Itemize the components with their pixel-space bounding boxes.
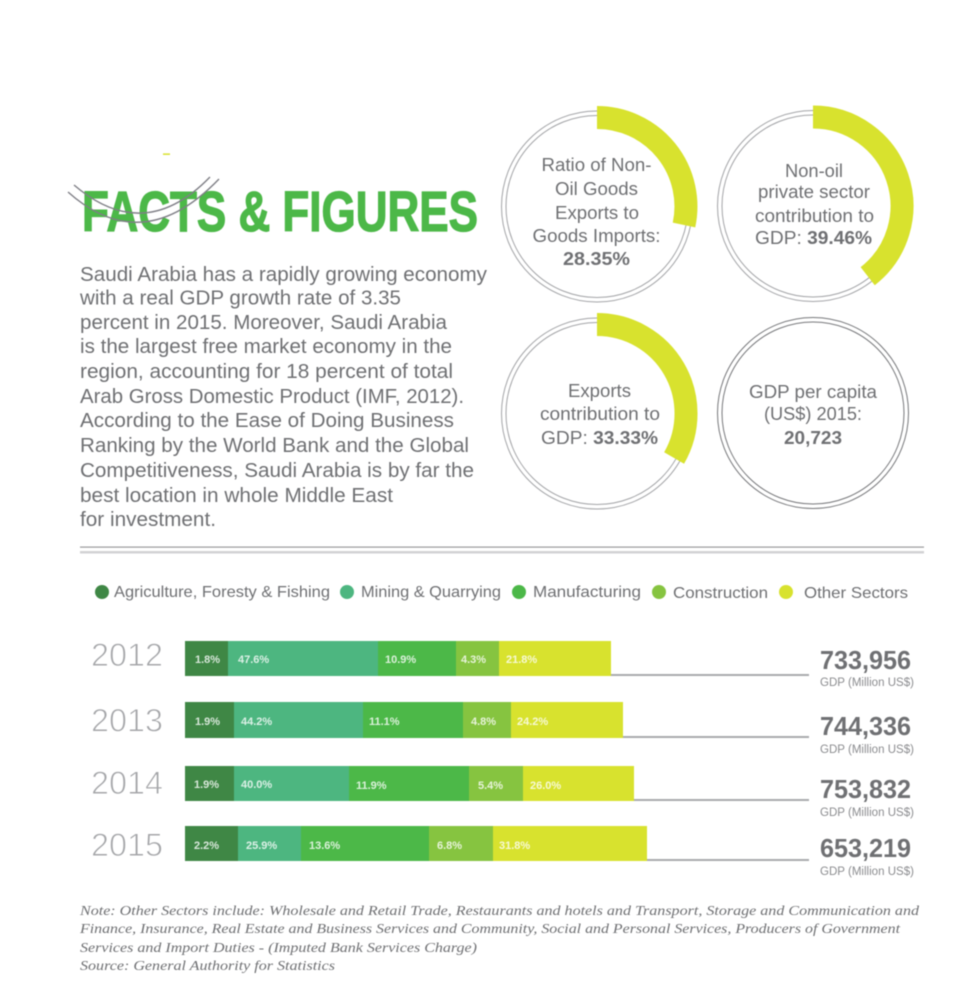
stat circle: GDP per capita (718, 318, 908, 508)
bar row 2014: GDP (Million US$) (820, 807, 914, 819)
bar row 2012: 4.3% (461, 654, 486, 666)
bar row 2013: GDP (Million US$) (820, 744, 914, 756)
intro text block: Saudi Arabia has a rapidly growing economy (80, 264, 487, 286)
note and source (79, 904, 920, 974)
intro text block: with a real GDP growth rate of 3.35 (79, 288, 401, 310)
bar row 2012: 2012 (91, 637, 163, 673)
bar row 2014: 11.9% (356, 780, 387, 792)
stat circle: exports contribution: GDP: 33.33% (541, 428, 658, 448)
bar row 2013: 24.2% (517, 716, 548, 728)
stat circle: non-oil private sector: GDP: 39.46% (755, 228, 872, 248)
stat circle: non-oil goods exports ratio (502, 111, 692, 302)
intro text block: region, accounting for 18 percent of total (80, 361, 453, 383)
bar row 2013: 44.2% (241, 716, 272, 728)
stat circle: non-oil private sector: Non-oil (785, 161, 843, 181)
note and source: Source: General Authority for Statistics (80, 959, 336, 974)
bar row 2014: 1.9% (194, 779, 219, 791)
intro text block: best location in whole Middle East (80, 485, 393, 507)
bar row 2015: 25.9% (246, 840, 277, 852)
intro text block (79, 264, 487, 531)
intro text block: is the largest free market economy in the (80, 336, 452, 358)
stat circle: GDP per capita: 20,723 (784, 428, 842, 448)
intro text block: Arab Gross Domestic Product (IMF, 2012). (80, 386, 464, 408)
bar row 2014 (91, 765, 914, 819)
stat circle: non-oil goods exports ratio: Ratio of Non- (542, 155, 652, 175)
stat circle: non-oil goods exports ratio: Goods Imports: (532, 226, 660, 246)
bar row 2015: 2.2% (194, 840, 219, 852)
bar row 2014: 5.4% (478, 780, 503, 792)
bar row 2013 (91, 702, 914, 756)
bar row 2013: 11.1% (369, 716, 400, 728)
bar row 2015: 653,219 (820, 833, 911, 863)
bar row 2012: 10.9% (385, 654, 416, 666)
legend (95, 584, 908, 602)
bar row 2015: 6.8% (437, 840, 462, 852)
bar row 2012: 21.8% (506, 654, 537, 666)
stat circle: non-oil goods exports ratio: 28.35% (563, 249, 630, 269)
bar row 2013: 2013 (91, 702, 163, 738)
bar row 2015: 2015 (91, 827, 163, 863)
stat circle: non-oil private sector (718, 110, 908, 302)
bar row 2012: 733,956 (820, 645, 911, 675)
intro text block: Competitiveness, Saudi Arabia is by far the (80, 460, 474, 482)
bar row 2012 (91, 637, 914, 689)
legend: Construction (673, 585, 768, 602)
stat circle: exports contribution (502, 318, 692, 509)
intro text block: percent in 2015. Moreover, Saudi Arabia (80, 312, 448, 334)
bar row 2014: 26.0% (530, 780, 561, 792)
legend: Mining & Quarrying (361, 584, 501, 601)
bar row 2013: 744,336 (820, 711, 911, 741)
legend: Manufacturing (533, 584, 641, 601)
bar row 2012: 1.8% (195, 654, 220, 666)
note and source: Note: Other Sectors include: Wholesale and Retail Trade, Restaurants and hotels and Transport, Storage and Communication and (79, 904, 920, 919)
legend: Agriculture, Foresty & Fishing (114, 584, 330, 601)
stat circle: non-oil goods exports ratio: Oil Goods (555, 179, 638, 199)
bar row 2012: GDP (Million US$) (820, 677, 914, 689)
intro text block: According to the Ease of Doing Business (80, 410, 454, 432)
stat circle: non-oil private sector: contribution to (755, 206, 874, 226)
bar row 2013: 4.8% (471, 716, 496, 728)
bar row 2015: 31.8% (499, 840, 530, 852)
bar row 2014: 2014 (91, 765, 163, 801)
bar row 2015 (91, 826, 914, 878)
bar row 2015: GDP (Million US$) (820, 866, 914, 878)
stat circle: GDP per capita: (US$) 2015: (764, 404, 862, 424)
stat circle: non-oil private sector: private sector (758, 182, 870, 202)
bar row 2014: 40.0% (241, 779, 272, 791)
bar row 2012: 47.6% (238, 654, 269, 666)
legend: Other Sectors (804, 585, 908, 602)
stat circle: GDP per capita: GDP per capita (749, 382, 878, 402)
intro text block: Ranking by the World Bank and the Global (80, 435, 469, 457)
note and source: Finance, Insurance, Real Estate and Business Services and Community, Social and Personal Services, Producers of Government (79, 922, 901, 937)
title: FACTS & FIGURES (82, 180, 478, 244)
bar row 2014: 753,832 (820, 774, 911, 804)
intro text block: for investment. (80, 509, 216, 531)
bar row 2013: 1.9% (195, 716, 220, 728)
bar row 2015: 13.6% (309, 840, 340, 852)
stat circle: non-oil goods exports ratio: Exports to (555, 203, 639, 223)
note and source: Services and Import Duties - (Imputed Bank Services Charge) (80, 941, 477, 956)
stat circle: exports contribution: contribution to (540, 404, 660, 424)
stat circle: exports contribution: Exports (568, 381, 631, 401)
